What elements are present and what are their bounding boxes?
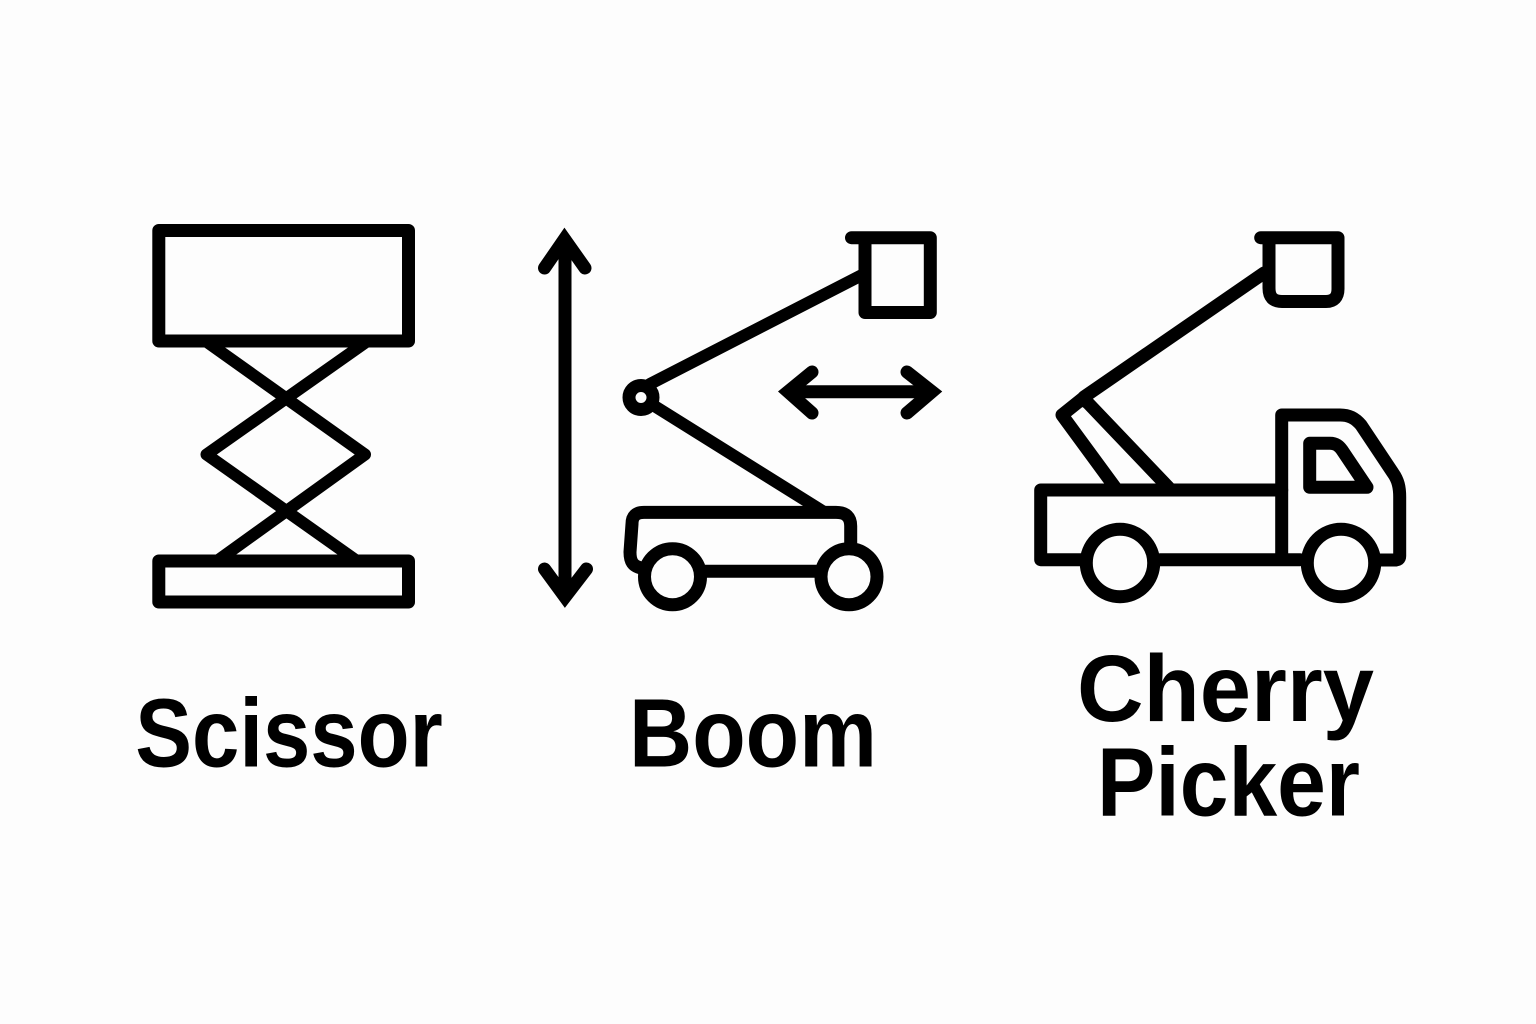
label: Cherry Picker (1077, 636, 1374, 837)
boom arms (650, 275, 862, 512)
boom basket (852, 238, 930, 312)
vertical double arrow (544, 239, 586, 597)
truck boom arm (1084, 273, 1264, 397)
label line: Picker: Picker (1097, 728, 1360, 837)
truck basket (1261, 238, 1338, 302)
icon: cherry picker truck (1041, 238, 1400, 597)
label: Scissor: Scissor (135, 678, 443, 788)
scissor platform (159, 230, 408, 341)
scissor arms (206, 341, 368, 561)
label line: Cherry: Cherry (1077, 636, 1374, 742)
label: Boom: Boom (629, 678, 877, 788)
boom chassis (630, 512, 851, 571)
truck cab (1160, 415, 1400, 560)
boom wheels (644, 549, 877, 605)
horizontal double arrow (788, 372, 932, 413)
truck window (1310, 443, 1367, 487)
truck bed (1041, 490, 1282, 560)
icon: boom lift (544, 238, 932, 605)
truck boom base (1062, 399, 1171, 490)
scissor base (159, 561, 408, 602)
icon: scissor lift (159, 230, 408, 602)
boom pivot (629, 386, 653, 410)
truck wheels (1086, 529, 1375, 597)
